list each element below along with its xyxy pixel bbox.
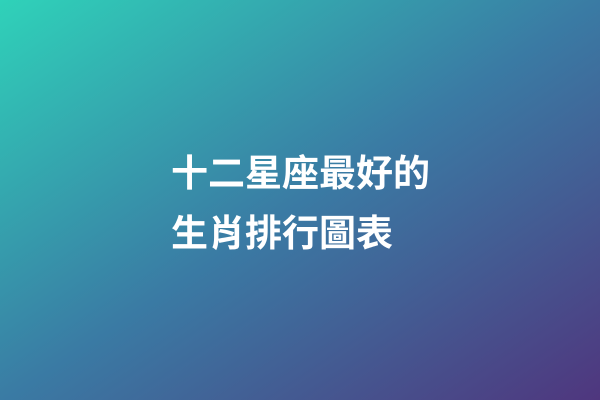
title line 2: 生肖排行圖表 (171, 213, 393, 254)
title (171, 153, 430, 254)
title line 1: 十二星座最好的 (171, 153, 430, 194)
